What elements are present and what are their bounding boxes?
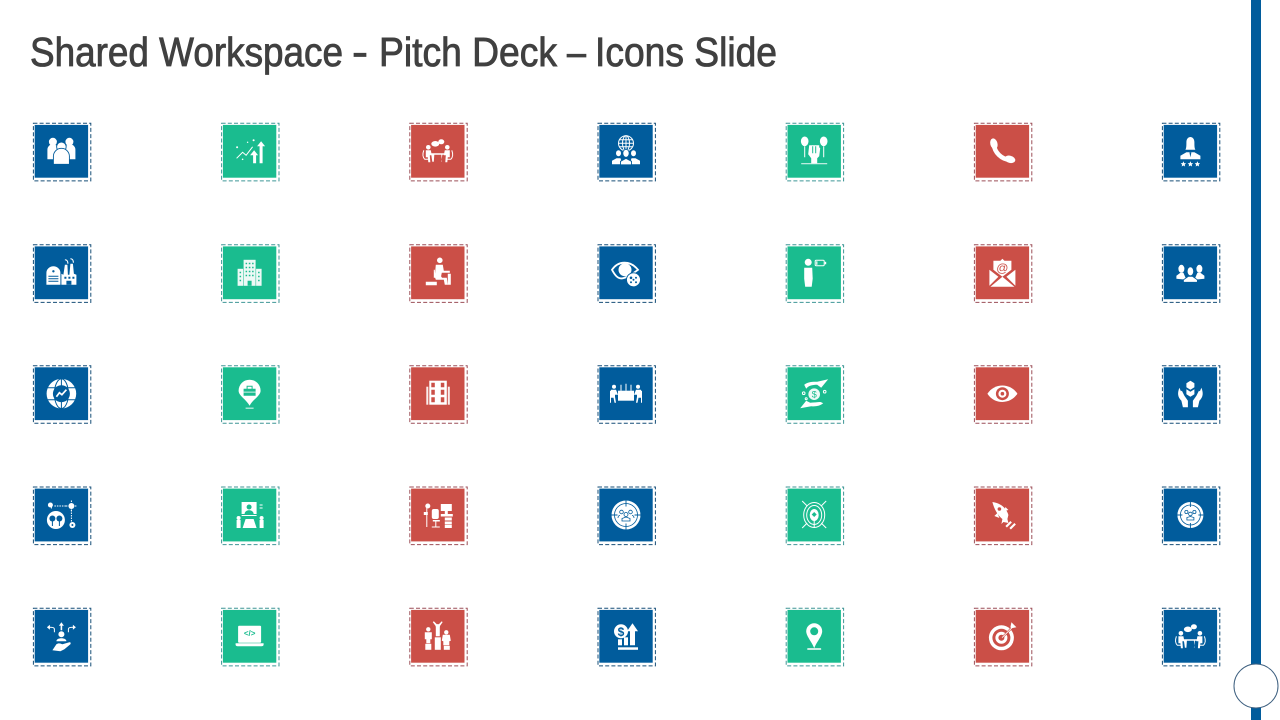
title: [30, 29, 777, 75]
tile: video presenter: [222, 487, 279, 545]
tile: boardroom meeting: [598, 366, 655, 423]
tile: target home: [786, 487, 844, 545]
title: Shared Workspace: [30, 29, 343, 75]
tile: location briefcase: [222, 366, 279, 423]
tile: seated person: [410, 245, 467, 302]
icon: office buildings: [238, 260, 262, 286]
icon: film strip columns: [426, 381, 450, 405]
title: –: [567, 29, 586, 75]
icon: hand with person and arrows: [47, 622, 76, 651]
icon: target with dart: [989, 622, 1016, 650]
tile: growth chart: [222, 123, 279, 181]
icon: team people: [47, 138, 75, 164]
icon: woman with three stars: [1180, 137, 1200, 166]
tile: global team: [598, 123, 655, 181]
tile: globe with chart: [33, 366, 91, 423]
tile: group of three: [1162, 245, 1220, 302]
icon: small target with people: [1177, 502, 1203, 528]
icon: person with low battery: [804, 259, 826, 287]
tile: money exchange: [786, 366, 844, 423]
icon: globe with trend: [47, 379, 76, 408]
icon: open envelope with at sign: @: [996, 261, 1008, 275]
icon: two people at board table: [610, 384, 642, 403]
icon: meeting at table: [423, 139, 453, 162]
tile: target team: [598, 487, 655, 545]
tile: vision eye: [974, 366, 1032, 423]
right sidebar bar: [1251, 0, 1261, 720]
tile: email: [974, 245, 1032, 302]
icon: hands holding box: [1178, 381, 1203, 407]
sidebar circle: [1234, 664, 1278, 708]
icon: target with people: [612, 500, 640, 530]
icon: seated person at desk: [426, 258, 451, 285]
tile: film strip: [410, 366, 467, 423]
icon: hands exchanging coin: $: [812, 390, 817, 400]
tile: office buildings: [222, 245, 279, 302]
tile: financial growth: [598, 608, 655, 666]
icon: office chair and desk: [424, 504, 453, 528]
title: -: [352, 29, 368, 75]
tile: career choices: [33, 608, 91, 666]
tile: star employee: [1162, 123, 1220, 181]
icon: growth arrows: [236, 139, 265, 163]
title: Pitch Deck: [379, 29, 557, 75]
icon: rocket launch: [992, 502, 1016, 530]
icon: tree circle with sun and drop: [47, 500, 77, 529]
icon: three business people: [1176, 265, 1204, 282]
icon: raised hand with balloons: [801, 136, 828, 164]
tile: target goal: [974, 608, 1032, 666]
icon: phone handset: [989, 138, 1016, 164]
tile: person with battery: [786, 245, 844, 302]
tile: podium winners: [410, 608, 467, 666]
tile: meeting conversation: [1162, 608, 1220, 666]
icon: eye with virus badge: [612, 263, 640, 287]
tile: target team small: [1162, 487, 1220, 545]
tile: factory: [33, 245, 91, 302]
icon: meeting with speech bubbles: [1176, 624, 1205, 648]
tile: eco tree energy: [33, 487, 91, 545]
tile: team people: [33, 123, 91, 181]
icon: presenter on screen: [237, 502, 264, 528]
tile: hand with coin balloons: [786, 123, 844, 181]
icon: map pin with briefcase: [239, 380, 261, 409]
tile: eye with virus: [598, 245, 655, 302]
tile: laptop code: [222, 608, 279, 666]
icon: dollar coin, bars and arrow: $: [618, 625, 625, 639]
icon: factory with chimneys: [46, 259, 76, 285]
tile: meeting conversation: [410, 123, 467, 181]
icon: eye: [987, 385, 1017, 402]
tile: phone: [974, 123, 1032, 181]
icon: people on podium: [425, 621, 451, 650]
title: Icons Slide: [595, 29, 777, 75]
icon: globe over people: [612, 136, 640, 165]
icon: map pin: [806, 623, 822, 650]
tile: location pin: [786, 608, 844, 666]
tile: hands protecting box: [1162, 366, 1220, 423]
tile: desk workstation: [410, 487, 467, 545]
tile: rocket: [974, 487, 1032, 545]
icon: concentric target outline: [802, 501, 826, 528]
icon: laptop with code: </>: [244, 629, 256, 638]
